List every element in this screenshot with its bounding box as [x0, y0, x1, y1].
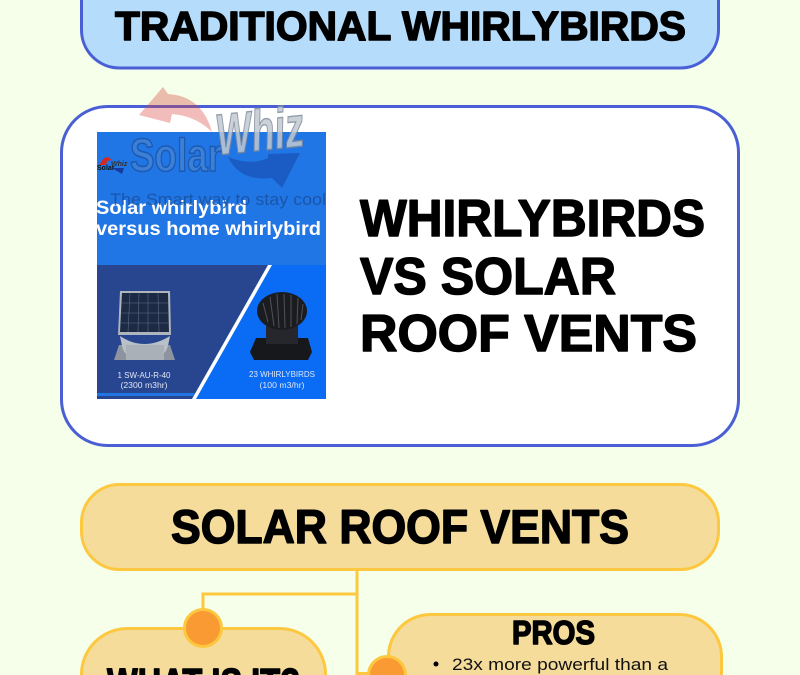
heading: traditional whirlybirds: TRADITIONAL WHIRLYBIRDS — [115, 3, 686, 49]
icon: blue arrow — [228, 153, 300, 188]
label: solar vent spec: 1 SW-AU-R-40 — [118, 371, 171, 380]
heading: image title: versus home whirlybird — [96, 219, 321, 240]
panel: main title card — [62, 87, 738, 446]
heading: image title — [96, 198, 321, 240]
connector lines — [203, 570, 372, 675]
heading: image title: Solar whirlybird — [96, 198, 247, 219]
image: solar whirlybird versus home whirlybird — [96, 132, 326, 399]
text: tagline: The Smart way to stay cool — [110, 190, 326, 209]
heading: whirlybirds vs solar roof vents: WHIRLYBIRDS — [360, 190, 705, 248]
bullet: first pro: 23x more powerful than a — [452, 655, 669, 674]
heading: solar roof vents: SOLAR ROOF VENTS — [171, 500, 629, 553]
icon: home whirlybird — [250, 292, 312, 360]
icon: orange node — [184, 610, 222, 646]
icon: orange node — [368, 657, 406, 675]
icon: small logo: Whiz — [111, 161, 128, 168]
panel: solar roof vents heading — [82, 484, 718, 570]
icon: red arrow — [139, 87, 212, 132]
icon: small logo: Solar — [97, 165, 115, 172]
label: whirlybird airflow: (100 m3/hr) — [260, 381, 305, 390]
panel: pros — [368, 614, 722, 675]
heading: whirlybirds vs solar roof vents: VS SOLAR — [360, 248, 616, 306]
text: whiz: Whiz — [213, 94, 307, 168]
panel: traditional whirlybirds heading — [82, 0, 718, 68]
text: solar: Solar — [130, 129, 222, 181]
label: whirlybird spec: 23 WHIRLYBIRDS — [249, 370, 315, 379]
icon: solar roof vent — [114, 291, 175, 360]
watermark: solar whiz logo — [110, 87, 326, 209]
icon: small logo — [97, 157, 128, 174]
heading: whirlybirds vs solar roof vents — [360, 190, 705, 363]
heading: pros: PROS — [512, 614, 595, 651]
panel: what is it — [81, 610, 326, 675]
heading: whirlybirds vs solar roof vents: ROOF VENTS — [360, 305, 697, 363]
label: solar vent airflow: (2300 m3hr) — [120, 381, 168, 390]
